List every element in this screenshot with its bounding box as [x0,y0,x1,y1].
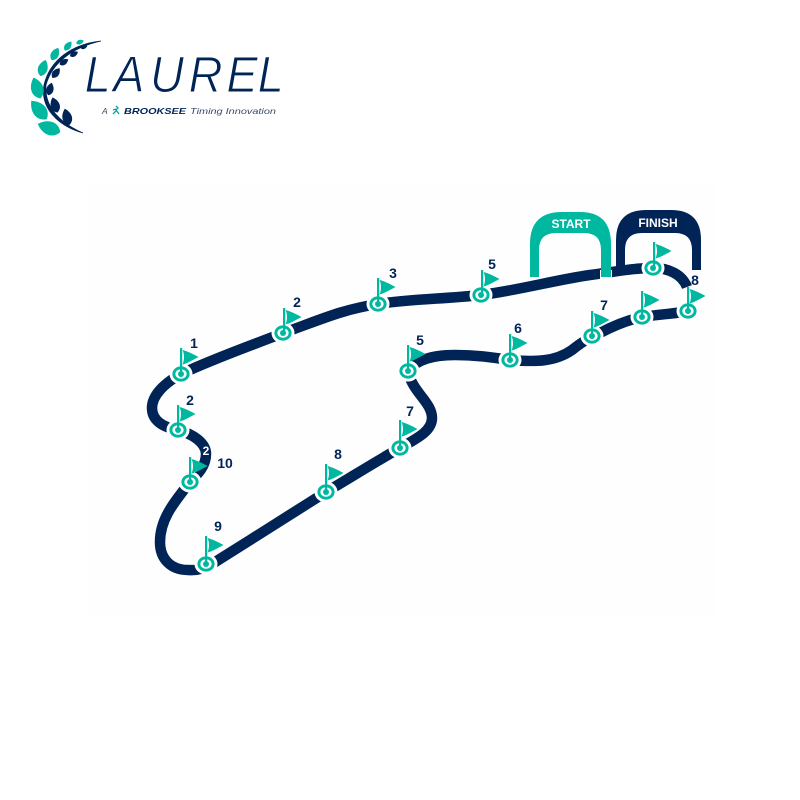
checkpoint numbers: 8 [334,446,342,462]
checkpoint numbers: 1 [190,335,198,351]
tagline: Timing Innovation [190,106,276,116]
checkpoint numbers [186,256,699,534]
checkpoint numbers: 2 [203,444,210,458]
laurel wreath icon [26,39,101,138]
checkpoint numbers: 7 [600,297,608,313]
checkpoint numbers: 3 [389,265,397,281]
checkpoint numbers: 5 [416,332,424,348]
start label: START [551,217,591,231]
finish label: FINISH [638,216,678,230]
checkpoint numbers: 2 [293,294,301,310]
checkpoint markers and flags [166,242,706,574]
tagline: A [101,106,108,116]
wordmark: LAUREL [85,47,284,103]
tagline: BROOKSEE [124,106,186,116]
checkpoint numbers: 7 [406,403,414,419]
start arch [530,212,612,279]
finish arch [616,210,701,270]
checkpoint numbers: 6 [514,320,522,336]
tagline [101,106,276,116]
checkpoint numbers: 10 [217,455,233,471]
checkpoint numbers: 9 [214,518,222,534]
checkpoint numbers: 2 [186,392,194,408]
checkpoint numbers: 8 [691,272,699,288]
checkpoint numbers: 5 [488,256,496,272]
race track [152,268,688,570]
logo: Laurel A Brooksee Timing Innovation [26,39,284,138]
